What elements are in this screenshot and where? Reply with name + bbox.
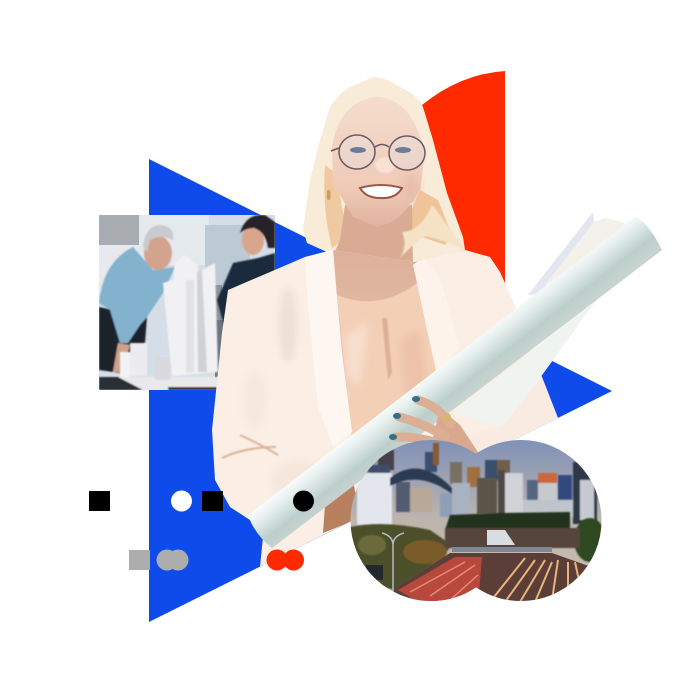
jacket shading — [276, 290, 310, 490]
right sleeve — [512, 378, 558, 440]
earring — [327, 190, 330, 200]
hair back — [303, 77, 465, 262]
black dot — [293, 490, 314, 512]
red circle segment — [422, 71, 505, 300]
face — [327, 97, 425, 227]
grey double dot — [156, 550, 188, 570]
black square right — [202, 491, 223, 511]
neck — [332, 205, 413, 265]
photo: architects with tower model — [99, 215, 275, 390]
black square left — [89, 491, 110, 511]
gantry and lamp — [452, 547, 552, 552]
trees — [350, 512, 606, 590]
overpass sign — [487, 530, 515, 545]
tower model — [99, 255, 222, 390]
woman holding roll — [200, 77, 662, 580]
blue triangle — [149, 159, 612, 622]
woman in dark shirt — [217, 215, 275, 330]
upper paper sheet — [528, 212, 636, 295]
nose — [375, 157, 395, 173]
smile — [360, 185, 402, 198]
left lapel — [305, 250, 352, 447]
photo: city skyline and highway — [350, 438, 606, 604]
lower paper sheet — [454, 300, 596, 427]
under-roll shadowed area — [323, 486, 356, 533]
blouse — [337, 283, 436, 440]
collage illustration — [89, 71, 662, 622]
right lapel — [413, 262, 420, 296]
jacket — [212, 250, 558, 566]
highway light trails — [393, 553, 588, 601]
hair inner strands — [324, 165, 344, 248]
glasses — [331, 135, 425, 170]
skyline buildings — [357, 443, 597, 525]
white dot — [171, 490, 192, 512]
paper roll — [248, 217, 662, 548]
eyes — [350, 147, 411, 153]
elbow fold — [222, 435, 278, 458]
hair strand over jacket — [400, 205, 465, 258]
grey square — [129, 550, 150, 570]
hand with nails — [389, 396, 480, 455]
neck and chest — [333, 250, 436, 399]
red double dot — [266, 550, 304, 570]
cheek shading — [403, 173, 419, 203]
man in blue shirt — [99, 225, 175, 373]
